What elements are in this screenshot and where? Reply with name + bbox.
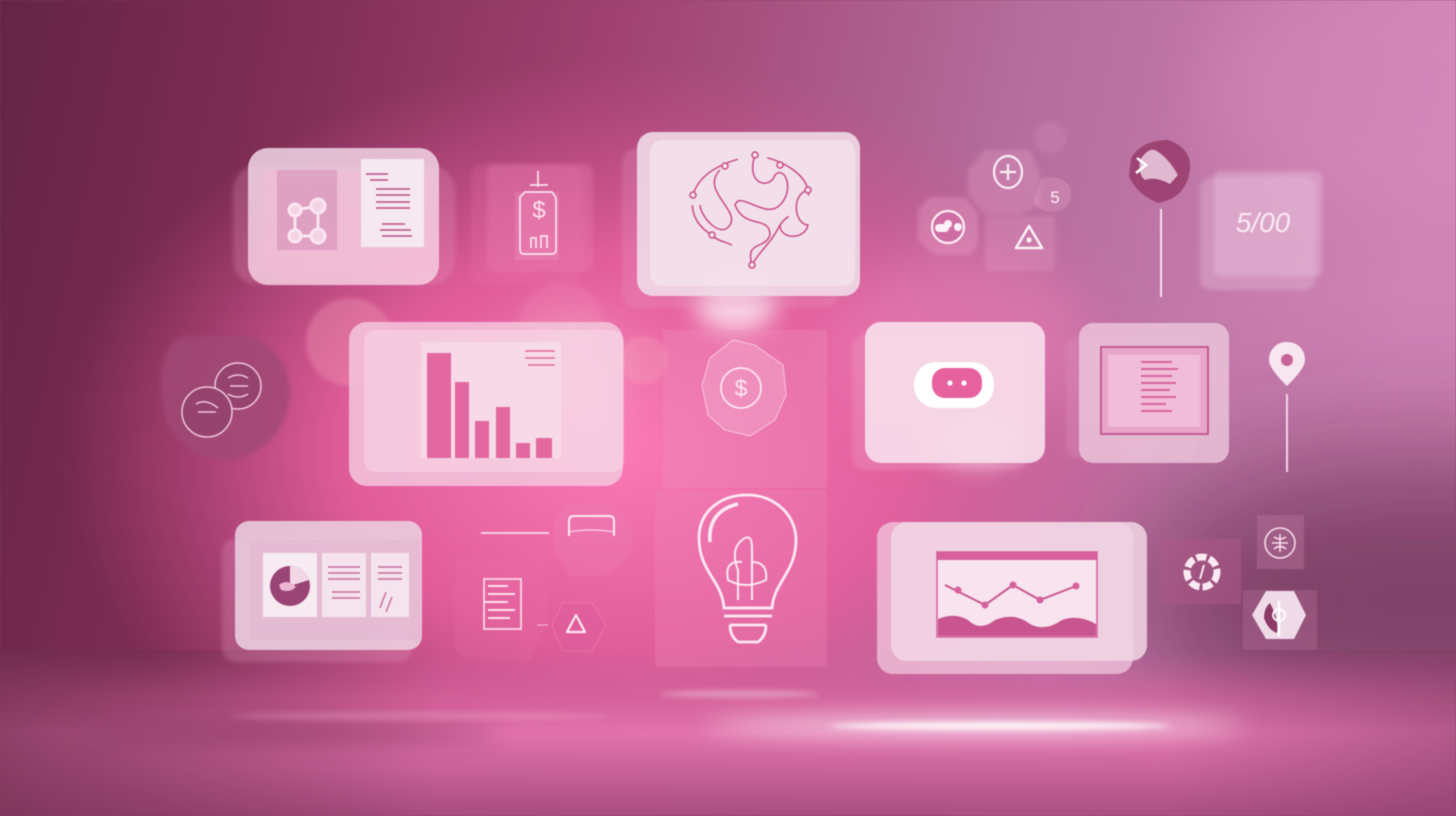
panel: chat bubble [852, 322, 1045, 470]
pie chart sheet [263, 553, 317, 617]
panel: central gear with dollar [663, 330, 827, 488]
panel: brain network [622, 132, 860, 308]
icon: tag with dollar: $ [532, 197, 546, 224]
panel: percentage card [1200, 171, 1322, 290]
panel: light bulb [655, 490, 827, 667]
map pin with vertical line [1269, 342, 1305, 472]
icon: bulb [699, 495, 796, 642]
connector line and hex badge [481, 504, 632, 576]
panel: central gear with dollar: $ [735, 375, 748, 401]
icon: round emblem [1257, 515, 1304, 569]
panel: documents with pie chart [222, 521, 422, 662]
icon label: s: 5 [1050, 188, 1060, 207]
panel: line chart window [877, 522, 1147, 674]
side sheet [371, 553, 409, 617]
panel: document outline [455, 558, 547, 660]
icon cluster: round badges [918, 122, 1071, 271]
panel: glass blob with coins [161, 336, 290, 460]
hex badge warning [537, 603, 606, 651]
document sheet [361, 159, 424, 247]
panel: bar chart [349, 322, 624, 486]
panel: framed document [1066, 323, 1229, 463]
chart legend lines [525, 351, 555, 365]
pin badge with vertical line [1129, 140, 1190, 297]
icon: gear [1160, 539, 1241, 604]
icon: triangle warning [1016, 226, 1042, 248]
area chart [938, 616, 1096, 636]
molecule diagram [277, 170, 337, 250]
panel: price tag icon [471, 164, 593, 285]
panel: percentage card: 5/00 [1236, 207, 1291, 238]
icon: chain circle [932, 211, 964, 243]
floor light streaks [80, 691, 1245, 741]
text sheet [322, 553, 366, 617]
panel: document with molecule diagram [233, 148, 455, 285]
icon: chat bubble [914, 362, 994, 408]
bar chart bars [427, 353, 552, 458]
line chart [945, 582, 1080, 608]
icon: hexagon pin [1243, 590, 1317, 650]
icon: plus circle [994, 156, 1022, 188]
icon: tangled network [690, 152, 811, 268]
light flares [306, 277, 1023, 466]
